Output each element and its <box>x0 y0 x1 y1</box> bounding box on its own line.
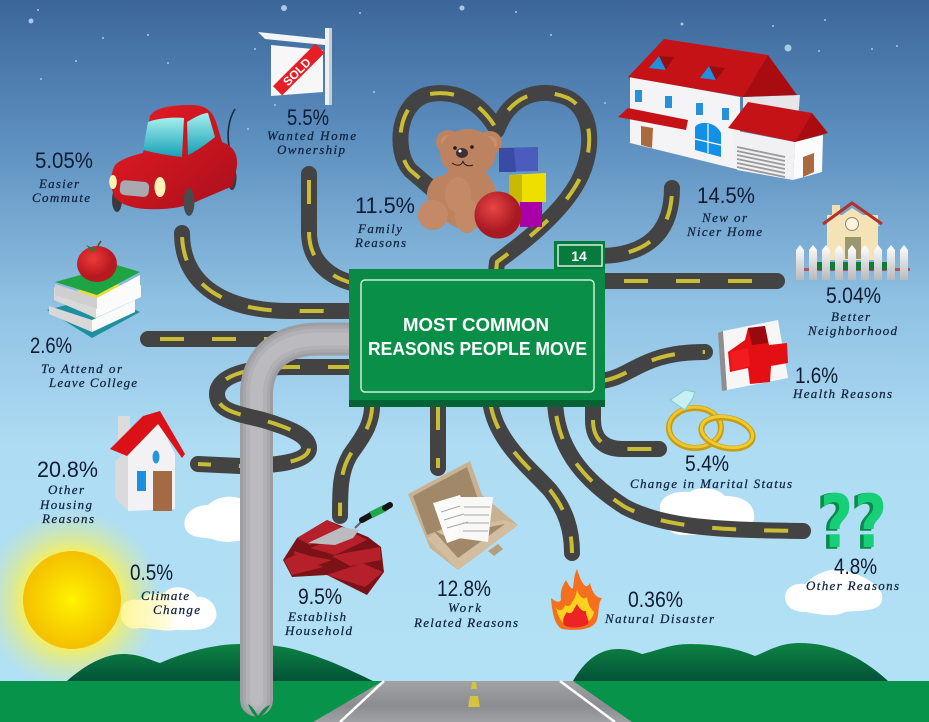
stat: home ownership: Wanted Home <box>267 128 356 143</box>
stat: natural disaster <box>604 587 715 626</box>
road: other housing over post <box>236 404 278 434</box>
stat: other reasons <box>806 554 899 593</box>
stat: other housing: Reasons <box>41 511 94 526</box>
stat: easier commute: Commute <box>32 190 90 205</box>
stat: other reasons: Other Reasons <box>806 578 899 593</box>
road: other reasons <box>555 400 803 531</box>
road: new home <box>600 188 672 256</box>
stat: work: Related Reasons <box>413 615 518 630</box>
stat: health: 1.6% <box>795 363 838 388</box>
grass <box>0 681 929 722</box>
stat: other housing: Other <box>48 482 85 497</box>
sun <box>23 551 121 649</box>
stat: natural disaster: Natural Disaster <box>604 611 715 626</box>
stat: college <box>30 333 137 390</box>
bottom book <box>47 295 140 338</box>
stat: new home: New or <box>701 210 748 225</box>
stat: college: To Attend or <box>41 361 123 376</box>
stat: easier commute: Easier <box>38 176 80 191</box>
middle book <box>53 282 141 318</box>
stat: establish household <box>284 584 352 638</box>
icon: wedding rings <box>669 390 756 453</box>
route number: 14 <box>571 248 587 264</box>
stat: work <box>413 576 518 630</box>
stat: neighborhood: 5.04% <box>826 283 881 308</box>
stat: marital: 5.4% <box>685 451 729 476</box>
road: other housing (rear) <box>198 367 352 466</box>
stat: new home: Nicer Home <box>686 224 762 239</box>
icon: question marks <box>817 480 887 566</box>
icon: question marks: ? <box>854 480 887 565</box>
icon: question marks: ? <box>817 481 850 566</box>
stat: establish household: Establish <box>287 609 346 624</box>
icon: house with fence <box>796 203 910 280</box>
stat: easier commute: 5.05% <box>35 148 93 173</box>
stat: home ownership: 5.5% <box>287 105 329 130</box>
icon: briefcase <box>408 461 518 570</box>
cloud: behind pole <box>184 497 242 542</box>
road: college <box>148 331 352 347</box>
stat: climate: Change <box>153 602 200 617</box>
stat: health: Health Reasons <box>792 386 892 401</box>
icon: fire <box>551 569 602 630</box>
stat: work: Work <box>448 600 481 615</box>
stat: family: Family <box>357 221 402 236</box>
road: work <box>430 400 446 468</box>
stat: work: 12.8% <box>437 576 491 601</box>
sun glow <box>0 510 162 690</box>
stat: family: 11.5% <box>355 193 415 218</box>
stat: other reasons: 4.8% <box>834 554 877 579</box>
stat: marital <box>630 451 792 491</box>
center line <box>468 682 480 707</box>
icon: question marks: ? <box>820 480 853 565</box>
stat: health <box>792 363 892 401</box>
stat: other housing: Housing <box>39 497 92 512</box>
stat: marital: Change in Marital Status <box>630 476 792 491</box>
stat: easier commute <box>32 148 93 205</box>
road: home ownership <box>309 174 352 283</box>
stat: college: 2.6% <box>30 333 72 358</box>
hills left <box>67 644 373 681</box>
stat: establish household: 9.5% <box>298 584 342 609</box>
stat: other housing: 20.8% <box>37 457 98 482</box>
icon: question marks: ? <box>851 481 884 566</box>
stat: home ownership <box>267 105 356 157</box>
road edge lines <box>340 681 615 722</box>
stat: neighborhood: Better <box>831 309 871 324</box>
road: health <box>600 352 705 381</box>
sign title: MOST COMMON <box>403 315 549 335</box>
hills right <box>573 643 888 681</box>
road: heart <box>400 93 589 272</box>
stat: establish household: Household <box>284 623 352 638</box>
icon: teddy bear <box>418 129 502 233</box>
stat: natural disaster: 0.36% <box>628 587 683 612</box>
icon: small house <box>110 411 185 511</box>
stat: climate <box>130 560 200 617</box>
icon: car <box>109 105 237 216</box>
icon: toy blocks and ball <box>474 147 546 238</box>
stat: college: Leave College <box>48 375 137 390</box>
icon: medical cross <box>718 320 788 391</box>
road: natural disaster <box>490 400 572 553</box>
stat: new home <box>686 183 762 239</box>
stat: climate: Climate <box>141 588 189 603</box>
road: neighborhood <box>600 273 777 289</box>
cloud: other reasons <box>785 569 882 615</box>
highway sign <box>349 241 605 407</box>
stat: other housing <box>37 457 98 526</box>
stars <box>28 5 898 130</box>
top book <box>55 265 140 309</box>
highway <box>313 681 632 722</box>
cloud: climate change <box>121 587 216 631</box>
icon: books and apple <box>47 241 141 338</box>
road: marital status <box>593 400 659 449</box>
icon: large house <box>618 39 828 180</box>
sign post <box>248 339 352 718</box>
road: establish household <box>340 400 372 516</box>
apple <box>77 241 117 282</box>
sign title: REASONS PEOPLE MOVE <box>368 339 587 359</box>
icon: bricks and trowel <box>283 505 390 595</box>
stat: new home: 14.5% <box>697 183 755 208</box>
cloud: marital status <box>660 488 754 535</box>
sign title <box>368 315 587 359</box>
stat: climate: 0.5% <box>130 560 173 585</box>
icon: sold sign: SOLD <box>280 55 314 89</box>
icon: sold sign <box>258 28 332 105</box>
stat: neighborhood: Neighborhood <box>807 323 898 338</box>
stat: family: Reasons <box>354 235 406 250</box>
stat: neighborhood <box>807 283 898 338</box>
road: easier commute <box>182 233 352 311</box>
route tab <box>554 241 605 271</box>
stat: family <box>354 193 415 250</box>
stat: home ownership: Ownership <box>277 142 346 157</box>
